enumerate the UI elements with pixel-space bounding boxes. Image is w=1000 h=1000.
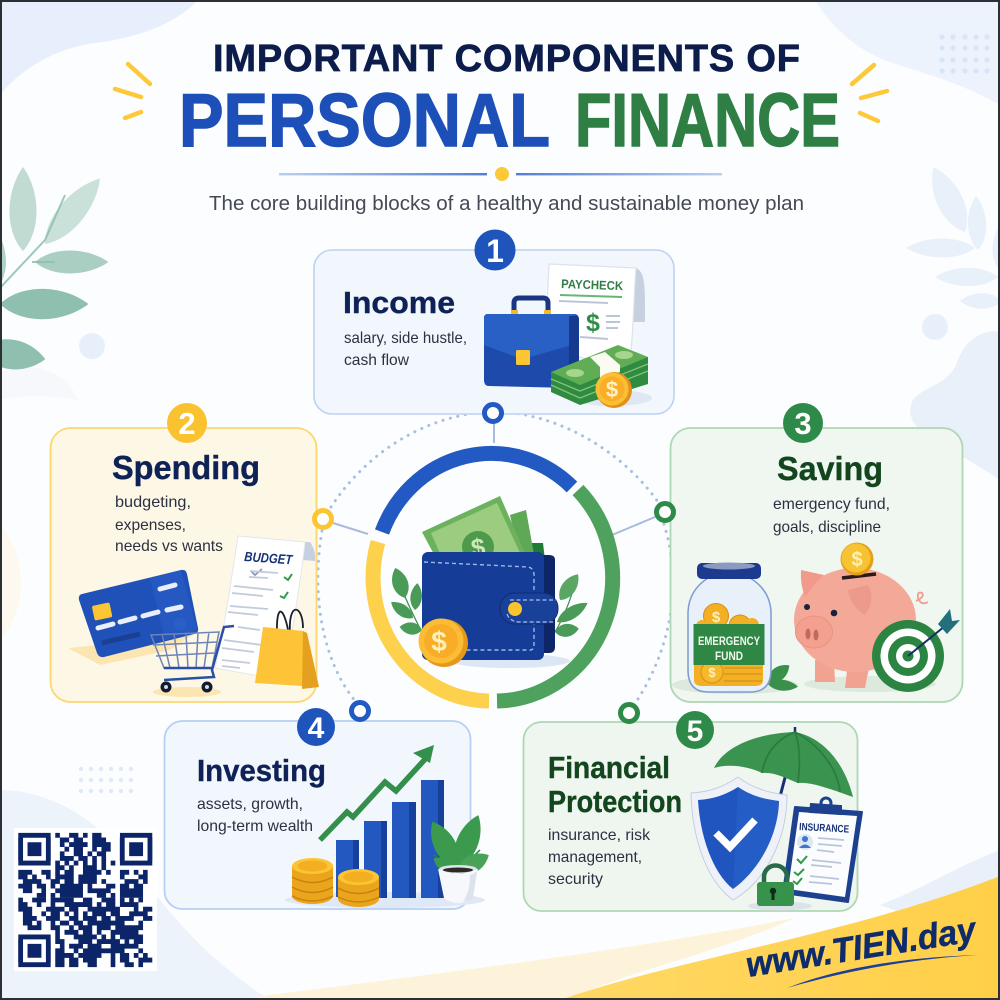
icon: shopping cart xyxy=(151,626,234,697)
badge 5 xyxy=(676,711,714,749)
node: income xyxy=(484,404,502,422)
text: protection description: insurance, risk xyxy=(548,827,651,844)
badge 1: 1 xyxy=(486,233,504,269)
heading: saving: Saving xyxy=(777,450,883,487)
sparks left xyxy=(115,64,150,118)
qr code xyxy=(14,828,157,971)
badge 4 xyxy=(297,708,335,746)
node: protection xyxy=(620,704,638,722)
icon: coin stacks xyxy=(292,858,379,907)
icon: cash stack xyxy=(551,345,652,406)
decoration: dot grid bottom left xyxy=(79,767,133,793)
text: spending description: needs vs wants xyxy=(115,538,223,555)
node: saving xyxy=(656,504,674,520)
connector ring dotted xyxy=(318,412,673,705)
heading: investing: Investing xyxy=(197,753,326,788)
icon: emergency fund jar: EMERGENCY xyxy=(698,634,760,648)
icon: paycheck: $ xyxy=(586,309,600,337)
decoration: circles xyxy=(79,314,948,359)
title word: finance: FINANCE xyxy=(575,78,840,162)
central ring xyxy=(373,453,613,701)
badge 2: 2 xyxy=(178,406,196,441)
heading: income: Income xyxy=(343,285,455,320)
icon: emergency fund jar xyxy=(672,562,798,694)
icon: target with arrow xyxy=(872,609,960,692)
icon: insurance clipboard xyxy=(783,798,862,902)
icon: center coin: $ xyxy=(431,626,447,657)
text: saving description: goals, discipline xyxy=(773,519,881,536)
badge 4: 4 xyxy=(308,712,325,745)
text: income description: cash flow xyxy=(344,352,409,369)
panel: income xyxy=(314,250,674,414)
badge 1 xyxy=(474,230,516,270)
text: investing description: assets, growth, xyxy=(197,796,303,813)
icon: shield xyxy=(691,777,787,900)
text: protection description: security xyxy=(548,871,603,888)
icon: emergency fund jar: $ xyxy=(708,665,716,680)
text: investing description: long-term wealth xyxy=(197,818,313,835)
decoration: green leaves xyxy=(0,167,110,374)
title word: personal: PERSONAL xyxy=(179,78,550,162)
text: income description: salary, side hustle, xyxy=(344,330,467,347)
badge 5: 5 xyxy=(687,715,703,748)
arrow: growth trend xyxy=(320,745,434,840)
icon: emergency fund jar: FUND xyxy=(715,649,743,663)
heading: financial protection: Financial xyxy=(548,750,670,785)
icon: paycheck xyxy=(545,264,645,365)
chart: growth bars xyxy=(285,780,485,908)
icon: emergency fund jar: $ xyxy=(712,609,721,626)
panel: spending xyxy=(50,428,319,702)
icon: gold coin xyxy=(596,372,632,408)
icon: gold coin: $ xyxy=(606,377,618,402)
badge 3: 3 xyxy=(794,406,812,441)
icon: potted plant xyxy=(423,811,493,903)
title divider xyxy=(279,167,722,181)
icon: wallet xyxy=(388,496,591,668)
connector spokes xyxy=(333,424,655,535)
text: spending description: expenses, xyxy=(115,517,186,534)
icon: paycheck: PAYCHECK xyxy=(561,277,623,293)
badge 2 xyxy=(167,403,207,443)
text: spending description: budgeting, xyxy=(115,494,191,511)
subtitle: The core building blocks of a healthy and sustainable money plan xyxy=(209,192,804,215)
yellow footer swoosh pale xyxy=(230,918,795,1000)
icon: briefcase xyxy=(484,298,579,388)
icon: insurance clipboard: INSURANCE xyxy=(799,821,849,836)
node: spending xyxy=(314,510,332,528)
text: saving description: emergency fund, xyxy=(773,496,890,513)
footer url: www.TIEN.day xyxy=(743,910,980,985)
panel: financial protection xyxy=(524,722,862,911)
icon: credit card xyxy=(68,570,200,665)
heading: spending: Spending xyxy=(112,449,260,486)
icon: piggy bank xyxy=(794,542,936,692)
icon: budget receipt: BUDGET xyxy=(244,549,294,567)
icon: budget receipt xyxy=(215,536,315,680)
heading: financial protection: Protection xyxy=(548,784,682,819)
icon: wallet: $ xyxy=(469,533,487,563)
yellow footer swoosh xyxy=(560,876,1000,1000)
panel: saving xyxy=(670,428,962,702)
icon: shopping bag xyxy=(255,610,319,689)
icon: piggy bank: $ xyxy=(851,549,863,571)
icon: umbrella xyxy=(714,727,853,812)
icon: padlock xyxy=(748,866,812,910)
node: investing xyxy=(352,702,368,720)
title line one: IMPORTANT COMPONENTS OF xyxy=(213,38,800,80)
decoration: pale blue leaves xyxy=(906,162,1000,309)
decoration: dot grid top right xyxy=(939,34,990,74)
footer underline swoosh xyxy=(787,955,978,988)
text: protection description: management, xyxy=(548,849,642,866)
sparks right xyxy=(852,65,887,121)
panel: investing xyxy=(164,721,493,909)
icon: center coin xyxy=(418,618,468,667)
badge 3 xyxy=(783,403,823,443)
